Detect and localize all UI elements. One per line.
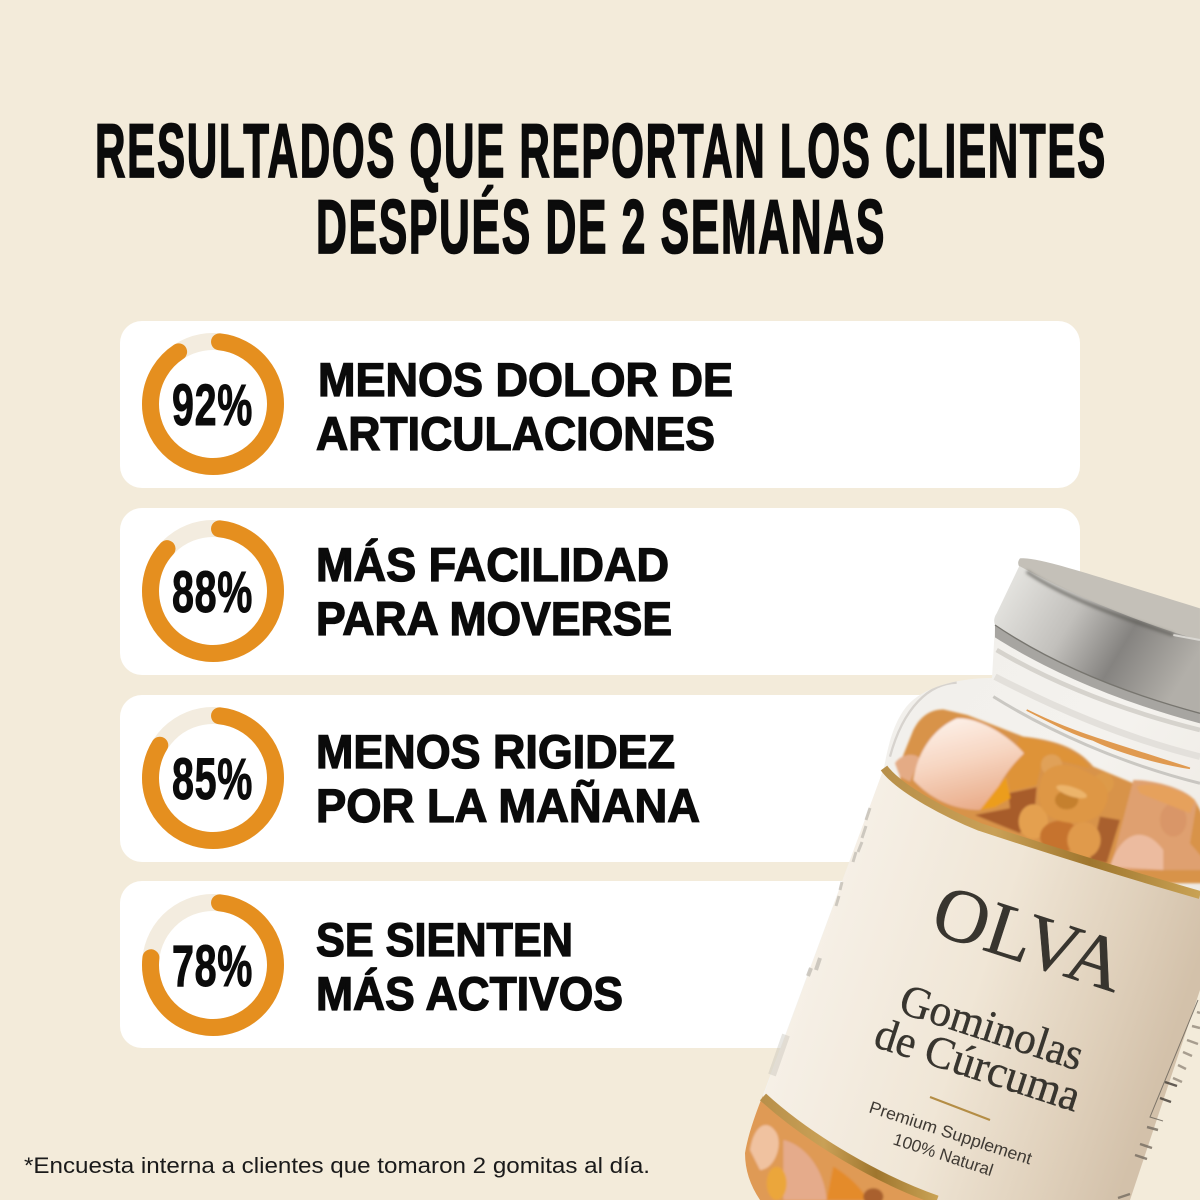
bottom gummies [745,1095,924,1200]
label divider [930,1097,990,1120]
panel: result 92% [120,321,1080,488]
brand text: OLVA [923,868,1135,1009]
label: menos dolor [316,353,733,460]
label: mas activos: MÁS ACTIVOS [316,967,623,1020]
bottom gold band [763,1097,937,1200]
label subtitle: 100% Natural [891,1130,996,1180]
nutrition panel [1118,1000,1200,1198]
gummy bear [1019,804,1048,839]
panel: result 78% [120,881,1080,1048]
label: mas facilidad: MÁS FACILIDAD [316,538,669,591]
product name: de Cúrcuma [869,1008,1087,1121]
donut: 85% [144,709,282,847]
panel: result 88% [120,508,1080,675]
label: mas facilidad [316,538,672,645]
product name: Gominolas [894,974,1090,1080]
label subtitle: Premium Supplement [867,1098,1035,1168]
donut: 88%: 88% [172,560,253,625]
donut: 88% [144,522,282,660]
label: mas activos: SE SIENTEN [316,913,573,966]
label: mas activos [316,913,623,1020]
label: menos rigidez: POR LA MAÑANA [316,779,700,832]
jar glass [745,625,1200,1200]
donut: 92% [144,335,282,473]
label: menos rigidez: MENOS RIGIDEZ [316,725,675,778]
panel: result 85% [120,695,1080,862]
donut: 78% [144,896,282,1034]
right gummy [1110,835,1163,870]
footnote: *Encuesta interna a clientes que tomaron 2 gomitas al día. [24,1153,650,1178]
glass reflections and gummies [740,650,1200,1200]
back label text marks [772,808,870,1075]
lid [994,558,1200,723]
top gold band [884,768,1200,895]
product jar [740,558,1200,1200]
title [95,109,1107,270]
donut: 85%: 85% [172,747,253,812]
glass ridges [993,697,1200,783]
donut: 92%: 92% [172,373,253,438]
label: menos dolor: MENOS DOLOR DE [318,353,733,406]
label: menos rigidez [316,725,700,832]
label: mas facilidad: PARA MOVERSE [316,592,672,645]
label [763,768,1200,1200]
gummy shapes [895,709,1200,883]
donut: 78%: 78% [172,934,253,999]
label: menos dolor: ARTICULACIONES [316,407,715,460]
